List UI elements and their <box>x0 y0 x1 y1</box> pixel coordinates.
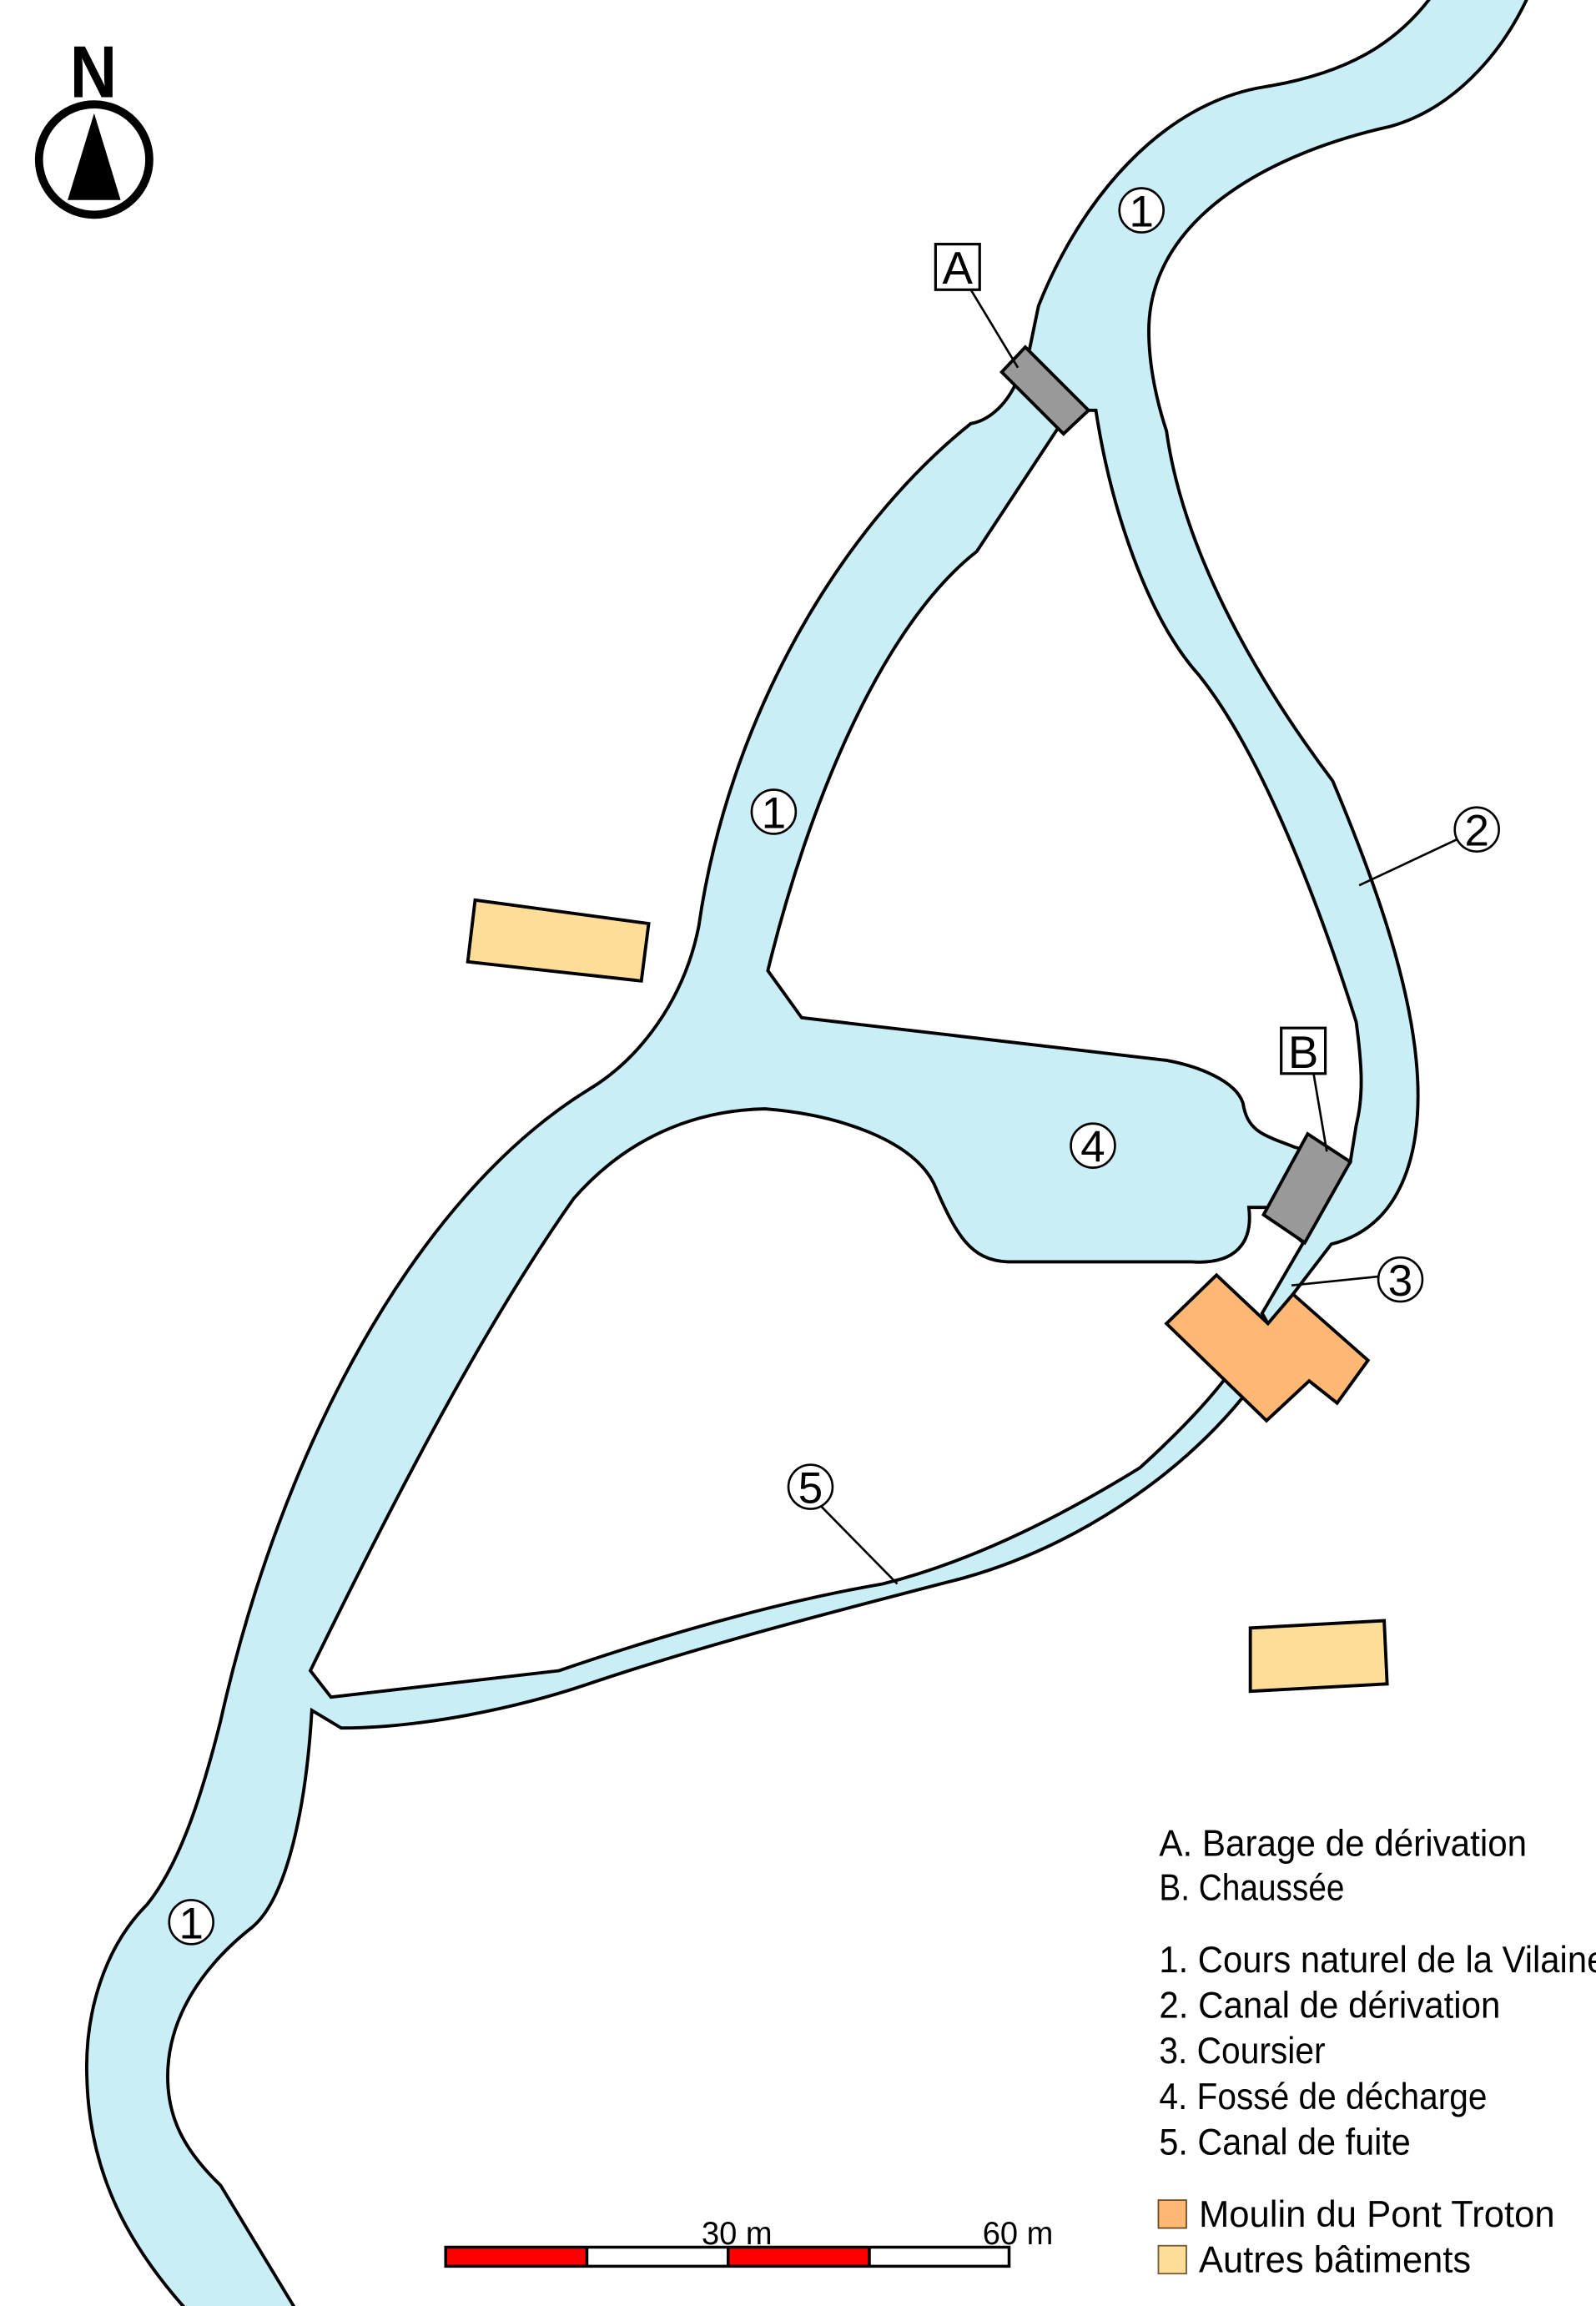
scale bar: 60 m <box>983 2216 1053 2252</box>
legend: buildings: Autres bâtiments <box>1199 2239 1471 2280</box>
scale bar: 30 m <box>702 2216 773 2252</box>
legend: structures: B. Chaussée <box>1159 1867 1345 1908</box>
marker 4 fossé de décharge <box>1071 1123 1115 1172</box>
marker 1 middle river: 1 <box>762 788 786 838</box>
marker 1 lower river <box>169 1899 214 1948</box>
marker 1 upper river <box>1120 187 1164 236</box>
dam B: chaussée <box>1264 1134 1351 1243</box>
callout B <box>1281 1027 1327 1151</box>
mill: Moulin du Pont Troton <box>1166 1275 1368 1421</box>
callout A: A <box>943 243 974 294</box>
marker 5 canal de fuite <box>788 1464 898 1583</box>
marker 1 upper river: 1 <box>1129 187 1154 236</box>
north arrow <box>39 30 149 214</box>
legend: buildings <box>1158 2194 1555 2280</box>
building: north-west <box>468 900 649 981</box>
marker 2 canal de dérivation <box>1359 807 1499 885</box>
legend: structures <box>1159 1824 1527 1908</box>
marker 3 coursier: 3 <box>1388 1256 1412 1306</box>
marker 3 coursier <box>1291 1256 1422 1306</box>
scale bar <box>446 2216 1053 2266</box>
legend: structures: A. Barage de dérivation <box>1159 1824 1527 1865</box>
legend: buildings: Moulin du Pont Troton <box>1199 2194 1555 2235</box>
marker 2 canal de dérivation: 2 <box>1464 807 1489 856</box>
callout A <box>935 243 1018 368</box>
marker 1 lower river: 1 <box>179 1899 204 1948</box>
building: south-east <box>1251 1621 1387 1691</box>
legend: water features: 4. Fossé de décharge <box>1159 2077 1488 2117</box>
callout B: B <box>1288 1027 1318 1078</box>
dam A: barrage de dérivation <box>1002 347 1089 434</box>
legend: water features: 5. Canal de fuite <box>1159 2122 1411 2163</box>
north arrow: N <box>70 30 117 113</box>
legend: water features <box>1159 1940 1596 2163</box>
legend: water features: 2. Canal de dérivation <box>1159 1986 1500 2026</box>
marker 5 canal de fuite: 5 <box>798 1464 823 1513</box>
marker 1 middle river <box>752 788 796 838</box>
marker 4 fossé de décharge: 4 <box>1080 1123 1105 1172</box>
legend: water features: 3. Coursier <box>1159 2031 1326 2072</box>
